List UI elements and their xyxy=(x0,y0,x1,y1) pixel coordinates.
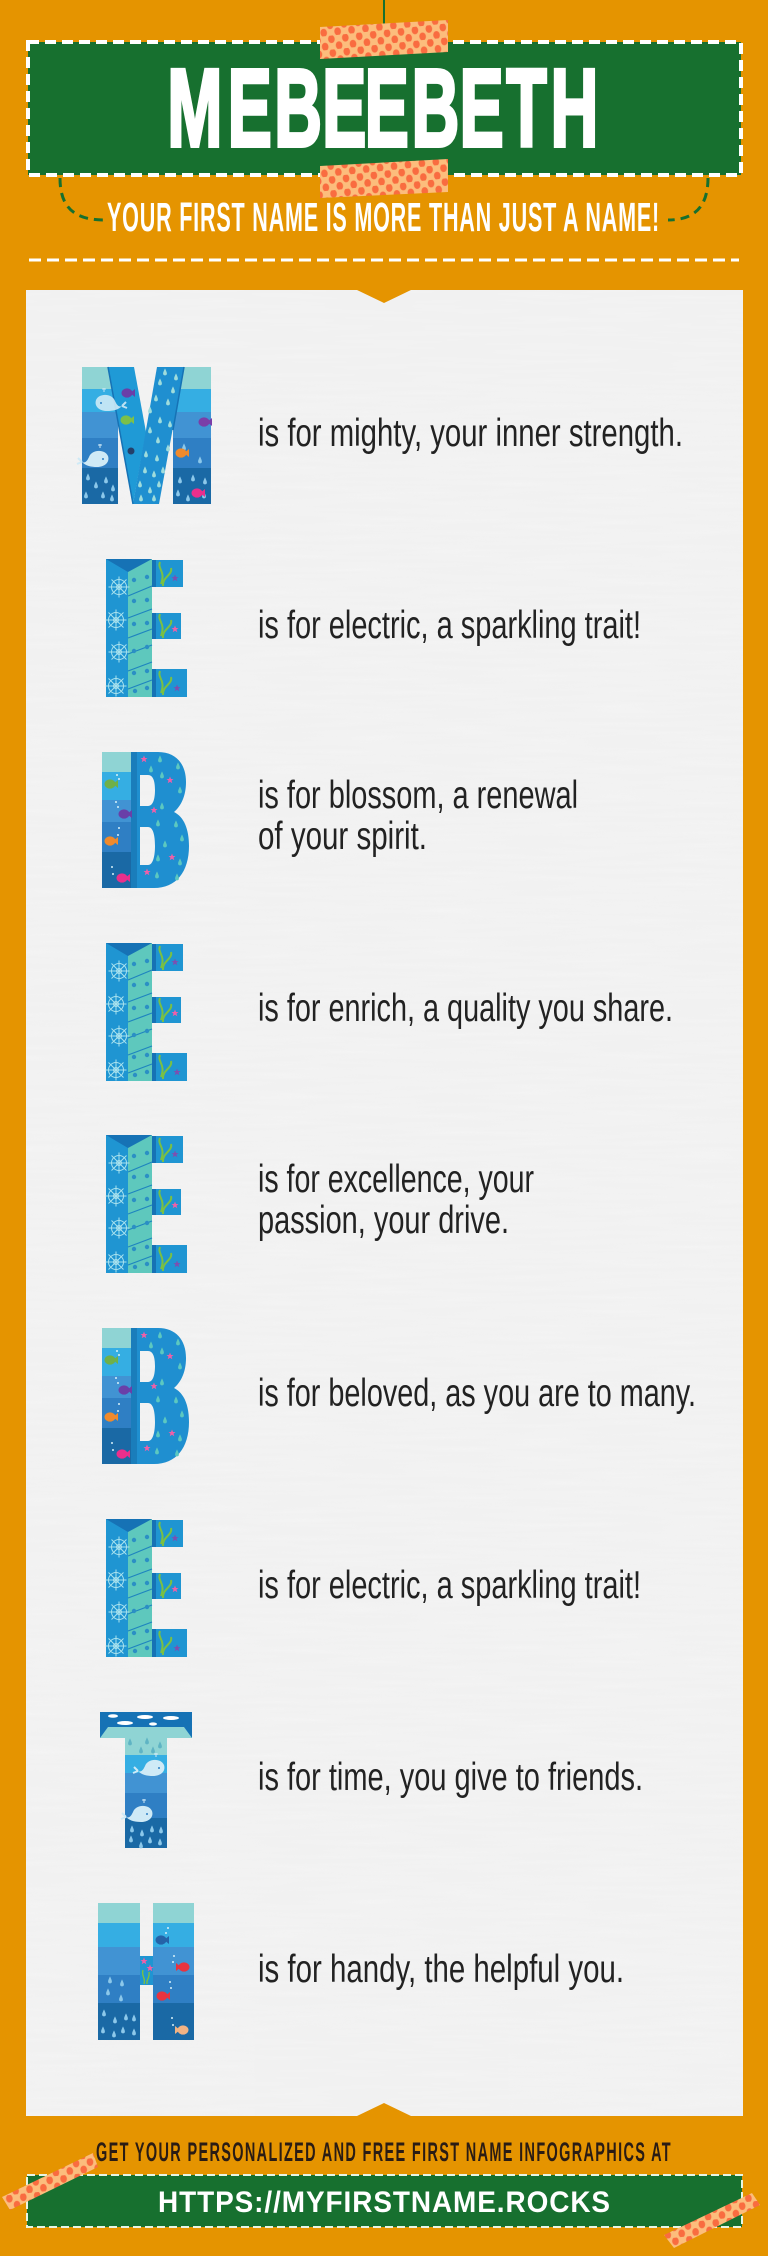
letter row 6: B xyxy=(102,1328,696,1464)
text: H: is for handy, the helpful you. xyxy=(258,1948,624,1991)
url: HTTPS://MYFIRSTNAME.ROCKS xyxy=(158,2186,611,2219)
letter row 2: E xyxy=(106,559,641,697)
letter row 1: M xyxy=(77,367,683,504)
text: E: is for electric, a sparkling trait! xyxy=(258,1564,641,1607)
text: E: is for electric, a sparkling trait! xyxy=(258,604,641,647)
icon: letter E xyxy=(106,559,187,697)
title banner xyxy=(28,42,741,175)
letter row 7: E xyxy=(106,1519,641,1657)
washi tape: bottom xyxy=(320,159,448,198)
dashed divider xyxy=(29,258,739,262)
letter row 9: H xyxy=(98,1903,624,2040)
icon: letter H xyxy=(98,1903,194,2040)
washi tape: top xyxy=(320,20,448,59)
letter row 3: B xyxy=(102,752,578,888)
text: B: is for blossom, a renewal xyxy=(258,774,578,817)
text: B xyxy=(258,774,578,858)
washi tape: footer right xyxy=(664,2193,760,2248)
dashed connectors xyxy=(60,178,708,220)
title: MEBEEBETH xyxy=(167,48,598,170)
washi tape: footer left xyxy=(2,2153,98,2210)
text: E xyxy=(258,1158,534,1242)
icon: letter M xyxy=(77,367,212,504)
icon: letter E xyxy=(106,943,187,1081)
text: E: is for excellence, your xyxy=(258,1158,534,1201)
letter row 8: T xyxy=(100,1712,643,1848)
text: T: is for time, you give to friends. xyxy=(258,1756,643,1799)
letter row 5: E xyxy=(106,1135,534,1273)
footer url banner xyxy=(27,2175,742,2227)
icon: letter E xyxy=(106,1135,187,1273)
icon: letter E xyxy=(106,1519,187,1657)
icon: letter B xyxy=(102,1328,189,1464)
hanging thread xyxy=(383,0,385,25)
panel: letter list background xyxy=(26,290,743,2116)
text: B: of your spirit. xyxy=(258,815,427,858)
icon: letter T xyxy=(100,1712,192,1848)
text: E: passion, your drive. xyxy=(258,1199,509,1242)
icon: letter B xyxy=(102,752,189,888)
letter row 4: E xyxy=(106,943,673,1081)
